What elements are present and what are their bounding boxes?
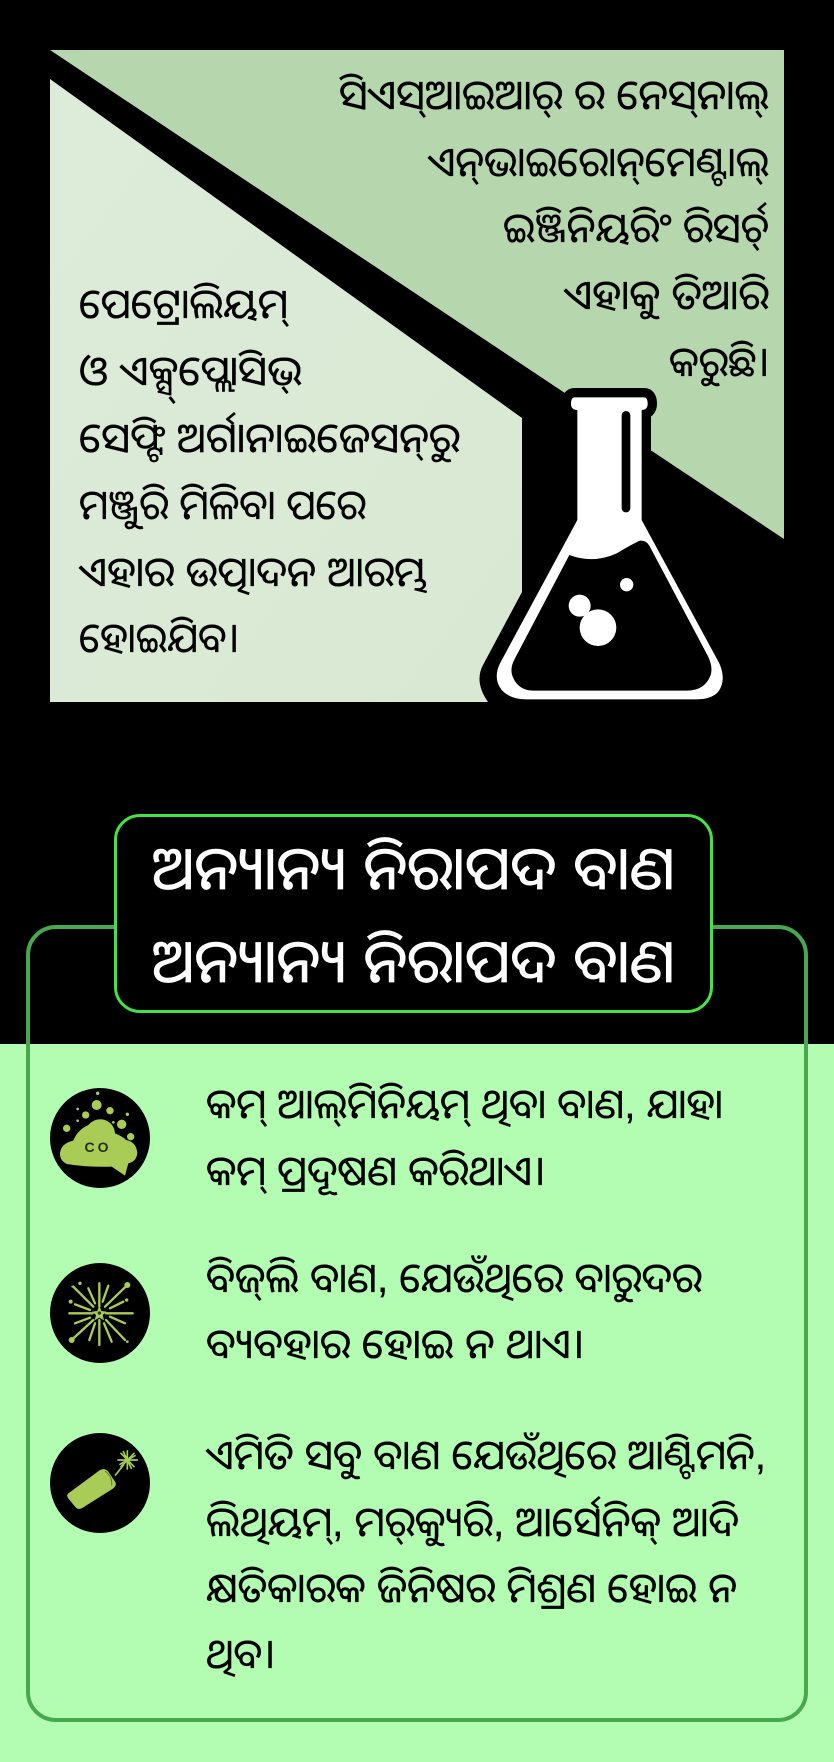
- text block: upper right: ଏନ୍‌ଭାଇରୋନ୍‌ମେଣ୍ଟାଲ୍: [427, 139, 769, 187]
- heading text: [152, 835, 675, 995]
- text: item 1: [206, 1081, 723, 1196]
- text: item 1: କମ୍ ଆଲ୍‌ମିନିୟମ୍ ଥିବା ବାଣ, ଯାହା: [206, 1081, 723, 1127]
- text: item 3: କ୍ଷତିକାରକ ଜିନିଷର ମିଶ୍ରଣ ହୋଇ ନ: [206, 1565, 737, 1611]
- text block: upper right: କରୁଛି।: [669, 339, 769, 387]
- text block: upper right: [339, 72, 769, 387]
- icon: sparkler burst: [50, 1263, 150, 1363]
- outlined list panel: [26, 925, 808, 1722]
- text block: lower left: [78, 281, 460, 661]
- icon: firecracker: [50, 1433, 150, 1533]
- heading text: ଅନ୍ୟାନ୍ୟ ନିରାପଦ ବାଣ: [152, 928, 675, 995]
- text block: lower left: ପେଟ୍ରୋଲିୟମ୍: [79, 281, 289, 327]
- heading text: ଅନ୍ୟାନ୍ୟ ନିରାପଦ ବାଣ: [152, 835, 675, 902]
- text block: upper right: ସିଏସ୍‌ଆଇଆର୍ ର ନେସ୍‌ନାଲ୍: [339, 72, 769, 118]
- icon: CO cloud: [50, 1088, 150, 1188]
- text: item 2: ବିଜ୍‌ଲି ବାଣ, ଯେଉଁଥିରେ ବାରୁଦର: [206, 1255, 702, 1303]
- upper right triangle: [50, 50, 784, 539]
- text: item 2: [206, 1255, 702, 1367]
- text block: lower left: ସେଫ୍ଟି ଅର୍ଗାନାଇଜେସନ୍‌ରୁ: [79, 412, 460, 463]
- text: item 3: ଲିଥିୟମ୍, ମର୍‌କ୍ୟୁରି, ଆର୍ସେନିକ୍ ଆଦି: [206, 1496, 739, 1547]
- icon: CO cloud: CO: [84, 1139, 109, 1155]
- text block: upper right: ଏହାକୁ ତିଆରି: [563, 272, 769, 320]
- text: item 3: ଥିବ।: [206, 1631, 275, 1677]
- lower left panel: [50, 79, 522, 702]
- panel: top triangles and flask: [50, 50, 784, 702]
- text block: upper right: ଇଞ୍ଜିନିୟରିଂ ରିସର୍ଚ୍: [503, 202, 769, 251]
- text block: lower left: ଓ ଏକ୍ସ୍‌ପ୍ଲୋସିଭ୍: [79, 348, 302, 404]
- heading box: [114, 814, 713, 1013]
- text block: lower left: ମଞ୍ଜୁରି ମିଳିବା ପରେ: [79, 482, 366, 530]
- light green lower background: [0, 1044, 834, 1762]
- icon: flask: [497, 397, 723, 699]
- text block: lower left: ହୋଇଯିବ।: [79, 615, 239, 661]
- text block: lower left: ଏହାର ଉତ୍ପାଦନ ଆରମ୍ଭ: [78, 549, 428, 595]
- text: item 3: [205, 1432, 766, 1677]
- text: item 3: ଏମିତି ସବୁ ବାଣ ଯେଉଁଥିରେ ଆଣ୍ଟିମନି,: [205, 1432, 766, 1480]
- text: item 1: କମ୍ ପ୍ରଦୂଷଣ କରିଥାଏ।: [206, 1148, 545, 1196]
- text: item 2: ବ୍ୟବହାର ହୋଇ ନ ଥାଏ।: [206, 1321, 584, 1367]
